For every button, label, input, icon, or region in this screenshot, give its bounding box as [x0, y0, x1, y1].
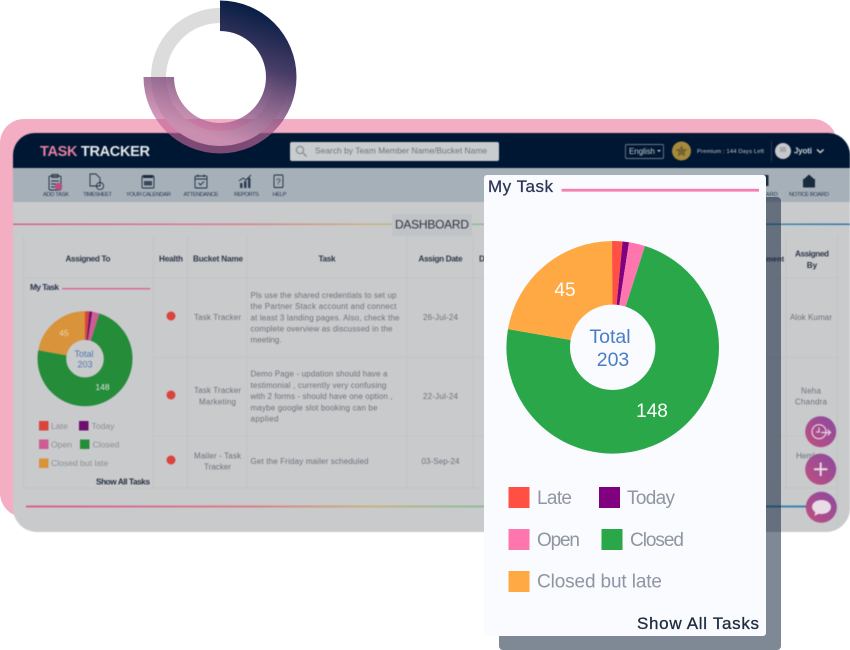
icon: add task	[49, 174, 62, 190]
search box: Search by Team Member Name/Bucket Name	[315, 146, 487, 156]
logo: TASK TRACKER	[40, 144, 151, 160]
decorative progress rings	[144, 0, 296, 154]
row 1	[166, 291, 832, 344]
my task widget	[30, 282, 150, 486]
popup shadow panel	[499, 197, 781, 650]
table header: Assign Date	[418, 254, 463, 264]
popup: my task enlarged	[484, 175, 766, 636]
popup value: 45: 45	[554, 280, 576, 301]
row 3	[166, 452, 826, 472]
search box	[290, 142, 499, 161]
popup show all link: Show All Tasks	[637, 614, 759, 633]
table grid	[23, 236, 838, 524]
icon: reports	[239, 175, 251, 188]
label: timesheet: TIMESHEET	[83, 192, 112, 198]
popup legend: Late	[537, 488, 572, 509]
language selector	[626, 144, 664, 158]
popup legend: Today	[627, 488, 676, 509]
gradient three-quarter ring	[144, 0, 296, 154]
popup legend	[508, 487, 684, 592]
action button: chat	[806, 492, 837, 523]
row 1: meeting.	[250, 336, 282, 344]
table header: Bucket Name	[193, 254, 243, 264]
row 3: Get the Friday mailer scheduled	[250, 457, 368, 466]
premium badge: Premium : 144 Days Left	[697, 149, 764, 155]
dashboard heading: DASHBOARD	[395, 218, 469, 232]
row 1: Alok Kumar	[790, 313, 832, 322]
table header: Task	[318, 254, 336, 264]
total label: 203	[77, 360, 93, 370]
legend: Closed but late	[51, 458, 109, 468]
user menu	[772, 141, 824, 162]
icon: help	[274, 175, 283, 188]
row 1: the Partner Stack account and connect	[250, 302, 397, 311]
table header: Assigned To	[66, 254, 110, 264]
row 1: Pls use the shared credentials to set up	[250, 291, 397, 300]
popup total label: Total	[589, 326, 631, 348]
legend: Late	[51, 421, 68, 431]
row 2: Demo Page - updation should have a	[250, 370, 388, 379]
task table	[23, 236, 838, 524]
row 3: Tracker	[204, 462, 231, 472]
label: add task: ADD TASK	[43, 192, 69, 198]
popup donut chart	[538, 273, 687, 422]
table header: By	[807, 261, 818, 270]
premium badge	[672, 142, 764, 160]
table header: ment	[766, 254, 785, 264]
my task widget: 148	[95, 382, 110, 392]
popup legend: Open	[537, 530, 580, 551]
label: help: HELP	[272, 192, 287, 198]
language selector: English	[629, 147, 655, 156]
popup total label: 203	[597, 349, 629, 371]
label: notice board: NOTICE BOARD	[789, 192, 829, 198]
gray ring	[158, 16, 282, 138]
label: your calendar: YOUR CALENDAR	[126, 192, 171, 198]
table header: Assigned	[795, 250, 829, 258]
row 2: Chandra	[795, 398, 828, 406]
dashboard window	[13, 133, 850, 532]
value labels: 45	[59, 328, 69, 338]
icon: dashboard shortcut, partly hidden	[764, 175, 768, 186]
window body	[13, 133, 850, 532]
row 2: 22-Jul-24	[423, 392, 459, 401]
label: reports: REPORTS	[234, 192, 259, 198]
legend: Closed	[92, 440, 119, 450]
top navigation bar	[13, 133, 850, 168]
row 2: with 2 forms - should have one option ,	[250, 392, 392, 401]
legend: Today	[92, 421, 115, 431]
popup title: My Task	[488, 177, 554, 196]
row 2: maybe google slot booking can be	[250, 403, 378, 412]
legend: Open	[51, 440, 72, 450]
title rule	[62, 288, 150, 289]
row 2: testimonial , currently very confusing	[250, 381, 386, 390]
pink background card	[0, 119, 837, 517]
footer rule	[26, 506, 816, 508]
legend	[39, 421, 119, 468]
icon: notice board	[803, 174, 815, 188]
row 1: Task Tracker	[194, 313, 241, 322]
icon: timesheet	[90, 174, 104, 190]
icon: help: ?	[276, 178, 281, 186]
dashboard heading rule	[13, 224, 850, 225]
action button: clock out	[805, 416, 836, 447]
row 2: Task Tracker	[194, 386, 241, 395]
row 2	[166, 370, 828, 423]
row 3: S	[808, 462, 814, 472]
popup legend: Closed but late	[537, 572, 662, 592]
table header	[66, 250, 829, 270]
table header: Health	[159, 254, 183, 264]
row 2: applied	[250, 414, 278, 423]
total label: Total	[74, 349, 94, 359]
dashboard heading	[392, 214, 472, 236]
row 3: Mailer - Task	[194, 452, 242, 460]
popup title rule	[562, 189, 759, 192]
row 2: Marketing	[199, 398, 236, 406]
toolbar	[13, 168, 850, 202]
user menu: Jyoti	[794, 146, 812, 156]
popup card	[484, 175, 766, 636]
donut chart	[52, 326, 118, 392]
row 1: complete overview as discussed in the	[250, 324, 393, 333]
row 3: Hemlata	[796, 452, 826, 460]
show all link: Show All Tasks	[96, 478, 150, 486]
action button: add	[805, 454, 836, 485]
icon: calendar	[142, 175, 154, 188]
popup legend: Closed	[630, 530, 684, 551]
label: dashboard shortcut, partly hidden: BOARD	[757, 192, 778, 198]
row 1: at least 3 landing pages. Also, check the	[250, 313, 400, 322]
popup value: 148: 148	[636, 401, 668, 422]
row 1: 26-Jul-24	[423, 313, 459, 322]
widget title: My Task	[30, 282, 59, 292]
table header: D	[479, 254, 485, 264]
row 2: Neha	[801, 386, 822, 396]
icon: attendance	[195, 174, 207, 188]
row 3: 03-Sep-24	[422, 457, 460, 466]
label: attendance: ATTENDANCE	[184, 192, 219, 198]
